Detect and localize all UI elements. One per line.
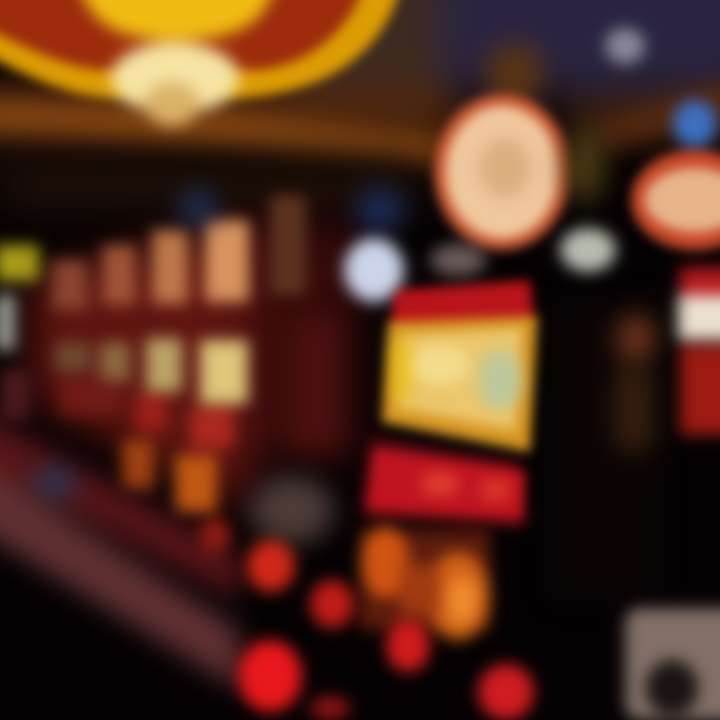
right sign xyxy=(631,100,720,250)
ceiling xyxy=(0,0,720,140)
red lights xyxy=(199,517,534,720)
upper left dark band xyxy=(0,160,420,210)
wooden beam xyxy=(0,80,720,165)
ceiling light xyxy=(605,28,645,64)
clock sign xyxy=(434,43,605,250)
aisle xyxy=(0,405,240,690)
gray box xyxy=(625,608,720,720)
right machine xyxy=(678,268,720,435)
slot machine xyxy=(360,280,538,640)
left machine row xyxy=(0,188,404,513)
chandelier xyxy=(0,0,405,126)
floor machine base xyxy=(250,476,334,544)
side glow xyxy=(344,228,616,302)
dark machine xyxy=(550,300,660,600)
